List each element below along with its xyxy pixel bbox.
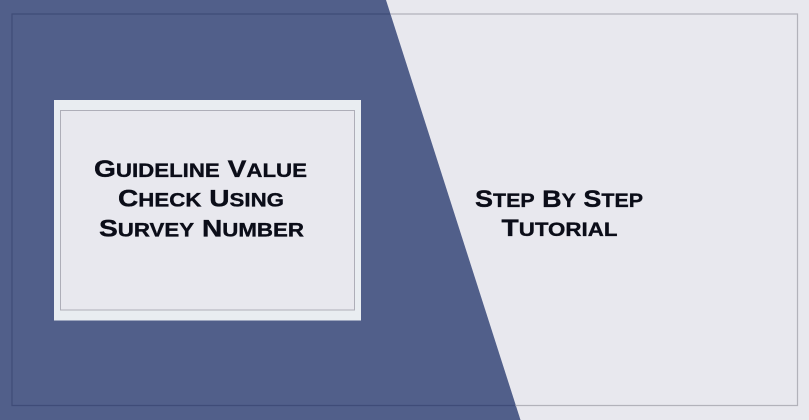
heading: step by step tutorial: Tutorial [502,211,618,242]
frame: thin outline on navy side [12,14,515,406]
heading: card title [94,152,307,242]
panel: title card [54,100,361,320]
card inner panel [60,110,354,310]
panel: navy diagonal left background [0,0,520,420]
heading: step by step tutorial: Step By Step [475,182,643,213]
card outer border [54,100,361,320]
heading: card title: Survey Number [99,212,304,242]
heading: card title: Check Using [118,182,284,212]
frame: thin outline on light side [391,14,798,406]
heading: step by step tutorial [475,182,643,242]
heading: card title: Guideline Value [94,152,307,183]
